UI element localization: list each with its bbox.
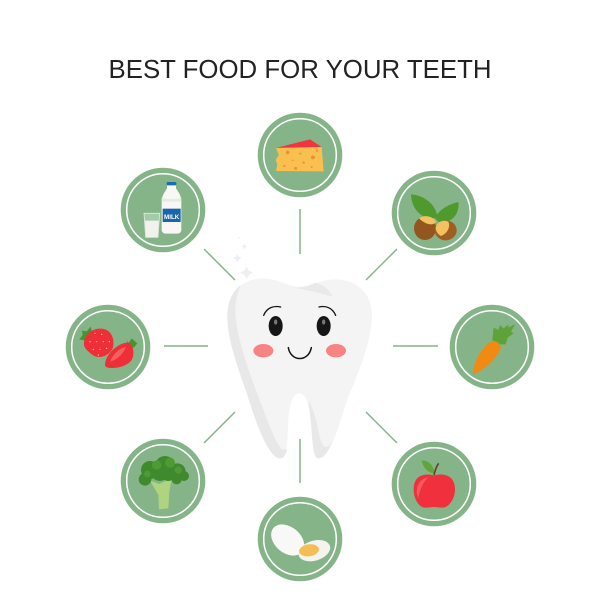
food: eggs [258,497,342,581]
sparkles [233,237,253,279]
food: milk: MILK [164,214,180,221]
food: broccoli [121,439,205,523]
food: apple [392,442,476,526]
eyes [264,307,336,336]
tooth shadow [227,285,287,458]
food: hazelnuts [392,171,476,255]
tooth character [227,237,372,458]
food: milk [121,168,205,252]
connector lines [164,209,438,483]
title: BEST FOOD FOR YOUR TEETH [108,54,492,84]
food: carrot [450,305,534,389]
smile [288,348,311,359]
food: cheese [258,113,342,197]
food: strawberries [66,305,150,389]
tooth body [227,278,372,458]
cheeks [253,344,273,357]
